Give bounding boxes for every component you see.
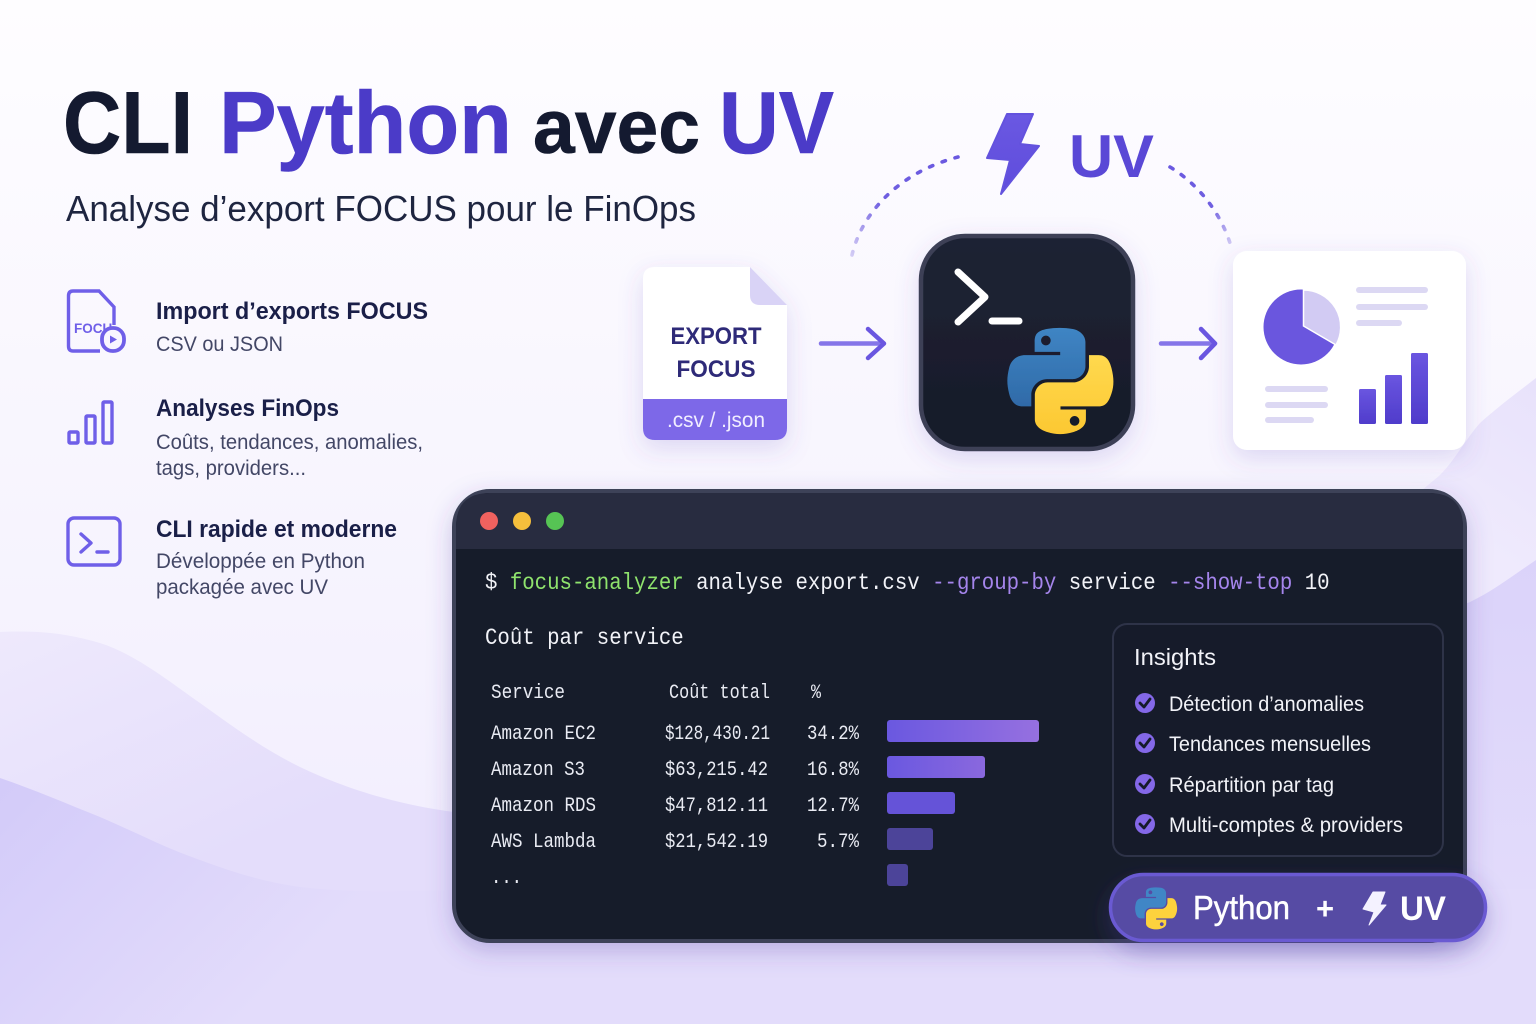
table title: Coût par service [485, 625, 684, 651]
title bar [456, 493, 1463, 549]
insights checklist: Répartition par tag [1169, 774, 1334, 797]
cost table: Service [491, 682, 565, 705]
heading: CLI rapide et moderne [156, 516, 397, 543]
cost table: $128,430.21 [665, 723, 770, 746]
insights checklist [1135, 693, 1403, 837]
legend lines top [1356, 287, 1428, 326]
arrow: cli to dashboard [1161, 329, 1215, 358]
heading: Analyses FinOps [156, 395, 339, 422]
cli app icon [921, 236, 1133, 449]
icon: file with FOCUS label: FOCU [74, 321, 112, 336]
subtitle: Analyse d’export FOCUS pour le FinOps [66, 188, 696, 229]
badge: python + uv [1110, 874, 1486, 940]
insights heading: Insights [1134, 644, 1216, 670]
arrow: file to cli [821, 329, 884, 358]
file: export focus [643, 267, 787, 440]
title: Python [219, 73, 512, 172]
title [63, 73, 834, 172]
cost table: Amazon EC2 [491, 723, 596, 746]
feature: import [68, 291, 428, 356]
pie chart [1264, 290, 1341, 364]
description [156, 431, 423, 480]
insights checklist: Tendances mensuelles [1169, 733, 1371, 756]
icon: bar chart [69, 402, 112, 443]
icon: python logo [1007, 328, 1113, 434]
file: export focus: .csv / .json [667, 409, 765, 432]
description: packagée avec UV [156, 576, 328, 599]
prompt symbol [958, 272, 1019, 322]
feature: cli [68, 516, 397, 599]
cost table: 16.8% [807, 759, 860, 782]
cost table: 12.7% [807, 795, 860, 818]
cost table: % [811, 682, 822, 705]
UV label: UV [1069, 123, 1154, 190]
title: avec [533, 85, 700, 170]
description: Développée en Python [156, 550, 365, 573]
insights checklist: Multi-comptes & providers [1169, 814, 1403, 837]
cost table: ... [491, 867, 522, 890]
panel: insights [1113, 624, 1443, 856]
cost table: AWS Lambda [491, 831, 596, 854]
cost table: 34.2% [807, 723, 860, 746]
description: Coûts, tendances, anomalies, [156, 431, 423, 454]
cost table: $21,542.19 [665, 831, 768, 854]
icon: python logo small [1135, 887, 1177, 929]
cost table [491, 682, 860, 890]
description: tags, providers... [156, 457, 306, 480]
title: CLI [63, 73, 193, 172]
insights checklist: Détection d’anomalies [1169, 693, 1364, 716]
cost table: Amazon S3 [491, 759, 585, 782]
window buttons [480, 512, 564, 530]
icon: file with FOCUS label [68, 291, 124, 351]
terminal window [454, 491, 1486, 941]
cost table: Amazon RDS [491, 795, 596, 818]
icon: bolt small [1363, 892, 1386, 925]
icon: terminal [68, 518, 120, 565]
file: export focus: FOCUS [676, 356, 756, 383]
feature list [68, 291, 428, 599]
dashboard card [1233, 251, 1466, 450]
cost table: 5.7% [817, 831, 860, 854]
window frame [454, 491, 1465, 941]
plus sign: + [1316, 891, 1334, 926]
heading: Import d’exports FOCUS [156, 298, 428, 325]
cost table: Coût total [669, 682, 770, 705]
legend lines bottom [1265, 386, 1328, 423]
python label: Python [1193, 889, 1290, 926]
cost table: $47,812.11 [665, 795, 768, 818]
dashed arc [852, 157, 1230, 255]
feature: analyses [69, 395, 423, 480]
command line: $ focus-analyzer analyse export.csv --group-by service --show-top 10 [485, 570, 1330, 596]
icon: lightning bolt [987, 114, 1039, 194]
description [156, 550, 365, 599]
uv label: UV [1400, 890, 1446, 928]
title: UV [719, 73, 834, 172]
file: export focus: EXPORT [670, 323, 762, 350]
bar chart [887, 720, 1039, 886]
column chart [1359, 353, 1428, 424]
description: CSV ou JSON [156, 333, 283, 356]
cost table: $63,215.42 [665, 759, 768, 782]
